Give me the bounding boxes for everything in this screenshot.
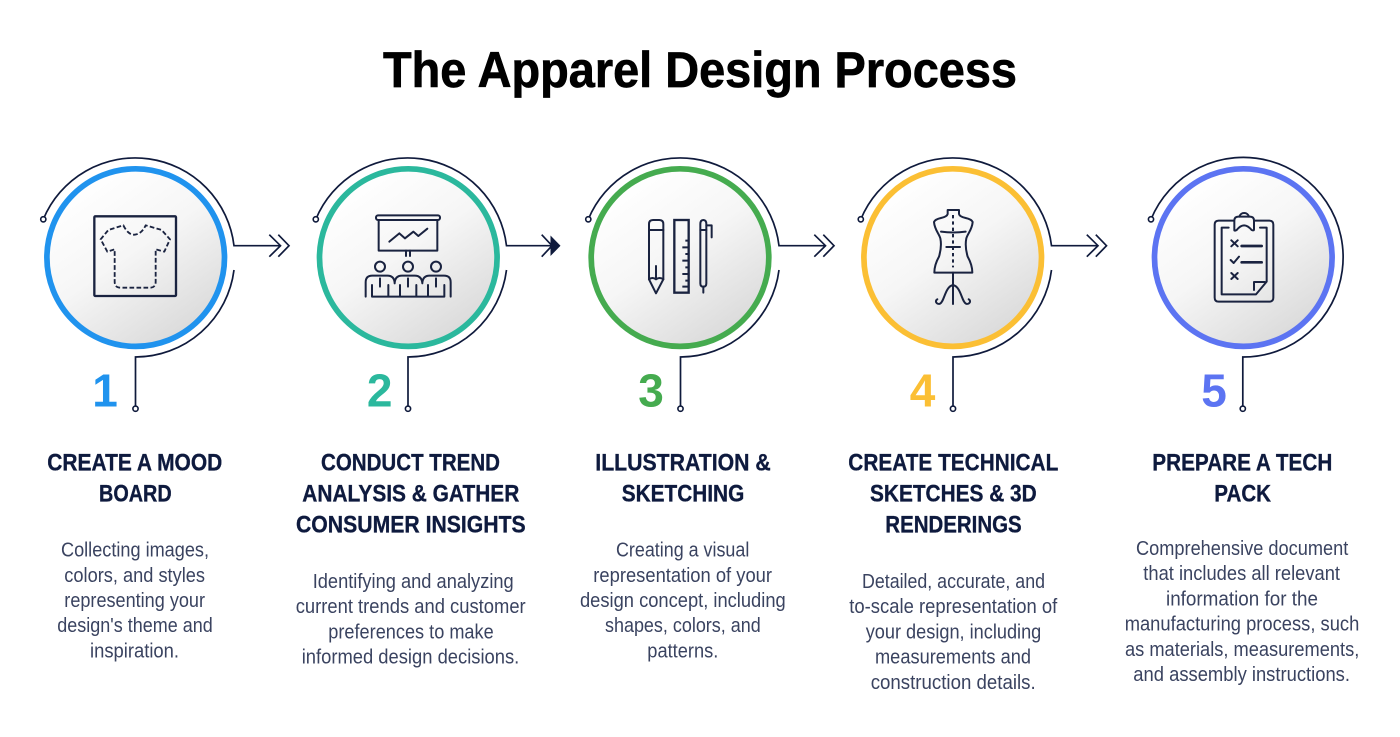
text block: step 1: Collecting images, bbox=[61, 540, 209, 562]
heading: step 5: PACK bbox=[1214, 481, 1271, 508]
text block: step 2: informed design decisions. bbox=[302, 647, 519, 669]
panel: step 3 illustration and sketching bbox=[580, 158, 834, 662]
number 5: 5 bbox=[1201, 365, 1227, 417]
text block: step 1: colors, and styles bbox=[64, 565, 205, 587]
text block: step 1 bbox=[57, 540, 213, 662]
connector and arrow: step 1 bbox=[41, 158, 289, 411]
text block: step 1: inspiration. bbox=[90, 640, 179, 662]
connector and arrow: step 3 bbox=[586, 158, 834, 411]
heading: step 4: SKETCHES & 3D bbox=[870, 481, 1037, 508]
text block: step 4: measurements and bbox=[875, 647, 1031, 669]
text block: step 4: construction details. bbox=[871, 672, 1036, 694]
text block: step 3: patterns. bbox=[647, 640, 718, 662]
text block: step 5: Comprehensive document bbox=[1136, 538, 1349, 560]
heading: step 2: CONSUMER INSIGHTS bbox=[296, 512, 526, 539]
connector and arrow: step 2 bbox=[313, 158, 560, 411]
number 1: 1 bbox=[92, 365, 118, 417]
ring: step 1 bbox=[47, 169, 224, 346]
panel: step 2 conduct trend analysis bbox=[296, 158, 560, 669]
number 4: 4 bbox=[910, 365, 936, 417]
heading: step 4: CREATE TECHNICAL bbox=[848, 450, 1058, 477]
heading: step 3 bbox=[595, 450, 771, 508]
text block: step 4: your design, including bbox=[866, 621, 1041, 643]
text block: step 5: manufacturing process, such bbox=[1125, 614, 1359, 636]
text block: step 5: as materials, measurements, bbox=[1125, 639, 1359, 661]
text block: step 3 bbox=[580, 540, 786, 662]
icon: clipboard checklist bbox=[1215, 213, 1273, 302]
text block: step 5: that includes all relevant bbox=[1143, 563, 1340, 585]
icon: t-shirt pattern bbox=[94, 216, 176, 296]
panel: step 5 prepare a tech pack bbox=[1125, 157, 1359, 686]
text block: step 4: Detailed, accurate, and bbox=[862, 571, 1045, 593]
heading: step 3: SKETCHING bbox=[622, 481, 744, 508]
connector and arrow: step 4 bbox=[858, 158, 1106, 411]
number 3: 3 bbox=[638, 365, 664, 417]
text block: step 2: preferences to make bbox=[328, 621, 494, 643]
text block: step 1: design's theme and bbox=[57, 615, 213, 637]
heading: step 4: RENDERINGS bbox=[885, 512, 1022, 539]
icon: presentation audience bbox=[366, 215, 451, 297]
text block: step 3: design concept, including bbox=[580, 590, 786, 612]
ring: step 2 bbox=[320, 169, 497, 346]
text block: step 5 bbox=[1125, 538, 1359, 686]
text block: step 5: information for the bbox=[1166, 588, 1318, 610]
heading: step 2: CONDUCT TREND bbox=[321, 450, 500, 477]
number 2: 2 bbox=[367, 365, 392, 417]
heading: step 1: CREATE A MOOD bbox=[47, 450, 222, 477]
icon: pencil ruler pen bbox=[649, 220, 712, 293]
text block: step 5: and assembly instructions. bbox=[1133, 664, 1350, 686]
text block: step 2: current trends and customer bbox=[296, 596, 526, 618]
heading: step 1 bbox=[47, 450, 222, 508]
heading: step 1: BOARD bbox=[99, 481, 172, 508]
heading: step 4 bbox=[848, 450, 1058, 539]
panel: step 4 technical sketches bbox=[848, 158, 1106, 694]
text block: step 3: Creating a visual bbox=[616, 540, 749, 562]
heading: step 5 bbox=[1152, 450, 1332, 508]
connector: step 5 bbox=[1148, 157, 1343, 411]
text block: step 3: shapes, colors, and bbox=[605, 615, 761, 637]
text block: step 2 bbox=[296, 571, 526, 669]
title: The Apparel Design Process bbox=[383, 42, 1017, 98]
text block: step 4: to-scale representation of bbox=[849, 596, 1058, 618]
icon: dress form mannequin bbox=[934, 210, 973, 304]
text block: step 4 bbox=[849, 571, 1058, 694]
heading: step 3: ILLUSTRATION & bbox=[595, 450, 771, 477]
panel: step 1 create a mood board bbox=[41, 158, 289, 662]
ring: step 4 bbox=[864, 169, 1042, 346]
text block: step 1: representing your bbox=[64, 590, 205, 612]
text block: step 3: representation of your bbox=[593, 565, 772, 587]
ring: step 3 bbox=[591, 169, 769, 346]
text block: step 2: Identifying and analyzing bbox=[313, 571, 514, 593]
heading: step 2: ANALYSIS & GATHER bbox=[302, 481, 520, 508]
heading: step 2 bbox=[296, 450, 526, 539]
ring: step 5 bbox=[1154, 169, 1332, 346]
heading: step 5: PREPARE A TECH bbox=[1152, 450, 1332, 477]
